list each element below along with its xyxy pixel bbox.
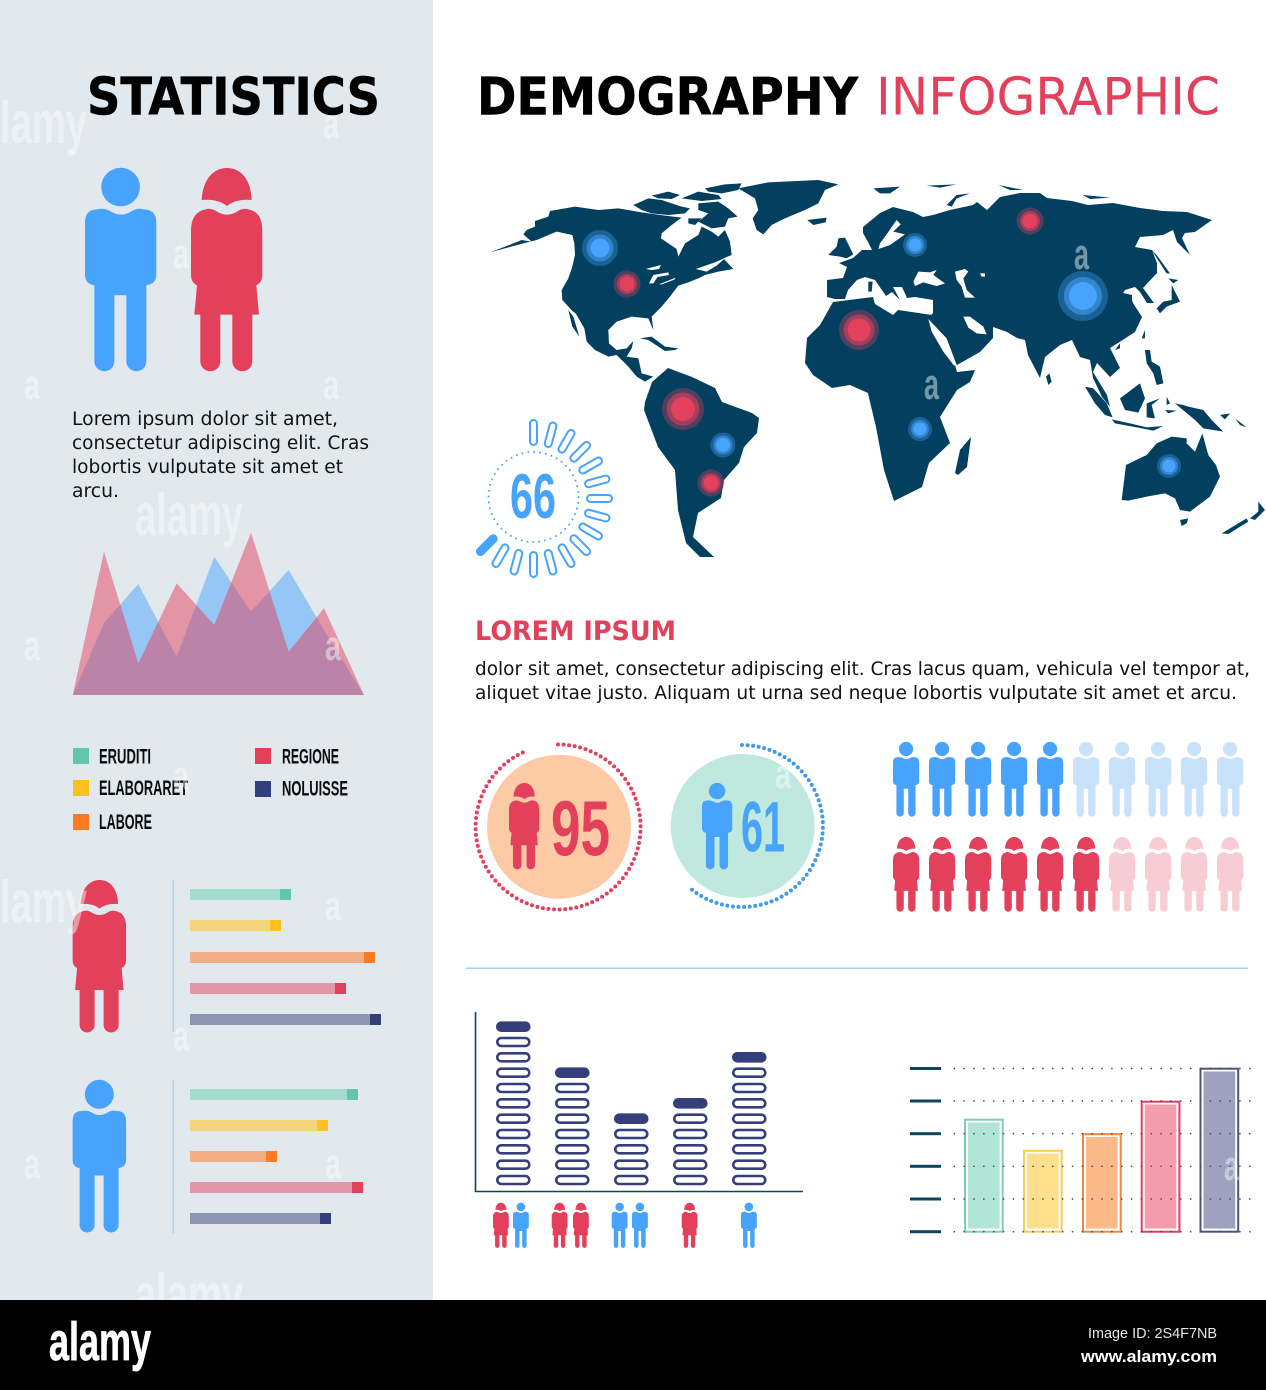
gauge: 66: 66 <box>510 462 556 532</box>
legend: ELABORARET <box>99 777 188 800</box>
heading: lorem ipsum: LOREM IPSUM <box>475 616 676 647</box>
legend: NOLUISSE <box>282 778 348 800</box>
stat circle: 95 <box>476 744 641 909</box>
text block: description <box>475 658 1250 704</box>
world map <box>490 180 1265 557</box>
watermarks: a <box>323 100 339 147</box>
text block: intro: arcu. <box>72 481 119 502</box>
legend: ERUDITI <box>99 746 151 768</box>
gauge: 66 <box>476 420 612 577</box>
legend <box>73 746 348 834</box>
watermarks: a <box>775 750 791 797</box>
watermarks: a <box>325 882 341 929</box>
watermarks: a <box>24 1140 40 1187</box>
watermarks: a <box>1074 230 1089 279</box>
column 1 <box>497 1023 529 1184</box>
text block: description: aliquet vitae justo. Aliquam ut urna sed neque lobortis vulputate sit amet et arcu. <box>475 682 1237 704</box>
legend: LABORE <box>99 811 152 834</box>
column 5 <box>733 1053 765 1184</box>
footer: www.alamy.com <box>1080 1347 1217 1366</box>
column 3 <box>615 1115 647 1184</box>
title: demography infographic: DEMOGRAPHY <box>477 68 859 128</box>
stat circle: 61 <box>671 745 823 907</box>
text block: intro: consectetur adipiscing elit. Cras <box>72 433 369 454</box>
watermarks: lamy <box>0 90 87 156</box>
watermarks: a <box>24 622 40 669</box>
watermarks: lamy <box>0 869 87 935</box>
female bar chart <box>73 880 381 1032</box>
icons: male and female figures <box>85 168 262 371</box>
pictogram: male ratio <box>893 742 1243 817</box>
pictogram: female ratio <box>893 837 1243 912</box>
framed bar chart <box>910 1067 1250 1233</box>
male bar chart <box>73 1080 363 1233</box>
text block: intro: lobortis vulputate sit amet et <box>72 457 343 478</box>
watermarks: a <box>173 230 189 277</box>
text block: intro: Lorem ipsum dolor sit amet, <box>72 409 338 430</box>
footer: alamy <box>49 1312 151 1372</box>
watermarks: a <box>924 360 939 409</box>
area chart <box>73 533 364 695</box>
column 4 <box>674 1099 706 1184</box>
column 2 <box>556 1069 588 1184</box>
watermarks: a <box>325 622 341 669</box>
watermarks: a <box>325 1140 341 1187</box>
title: demography infographic: INFOGRAPHIC <box>876 68 1220 128</box>
watermarks: a <box>173 752 189 799</box>
stat circle: 61: 61 <box>741 788 785 868</box>
panel: left statistics background <box>0 0 433 1300</box>
title: demography infographic <box>477 68 1220 128</box>
footer: Image ID: 2S4F7NB <box>1088 1325 1217 1342</box>
map region: oceania <box>1046 350 1265 534</box>
stat circle: 95: 95 <box>551 784 610 872</box>
map region: europe detail <box>828 184 1023 366</box>
text block: intro <box>72 409 369 502</box>
watermarks: a <box>173 1012 189 1059</box>
watermarks: a <box>24 361 40 408</box>
map region: east asia islands <box>1083 195 1180 350</box>
title: statistics: STATISTICS <box>87 68 380 128</box>
footer <box>0 1300 1266 1390</box>
watermarks: alamy <box>135 482 243 548</box>
stacked pill chart <box>476 1012 803 1248</box>
watermarks: a <box>323 361 339 408</box>
figures under columns <box>493 1203 757 1248</box>
text block: description: dolor sit amet, consectetur adipiscing elit. Cras lacus quam, vehicula vel tempor at, <box>475 658 1250 680</box>
watermarks: alamy <box>135 1262 243 1328</box>
watermarks: a <box>1224 1142 1239 1189</box>
legend: REGIONE <box>282 746 339 768</box>
map region: north america <box>490 180 838 382</box>
